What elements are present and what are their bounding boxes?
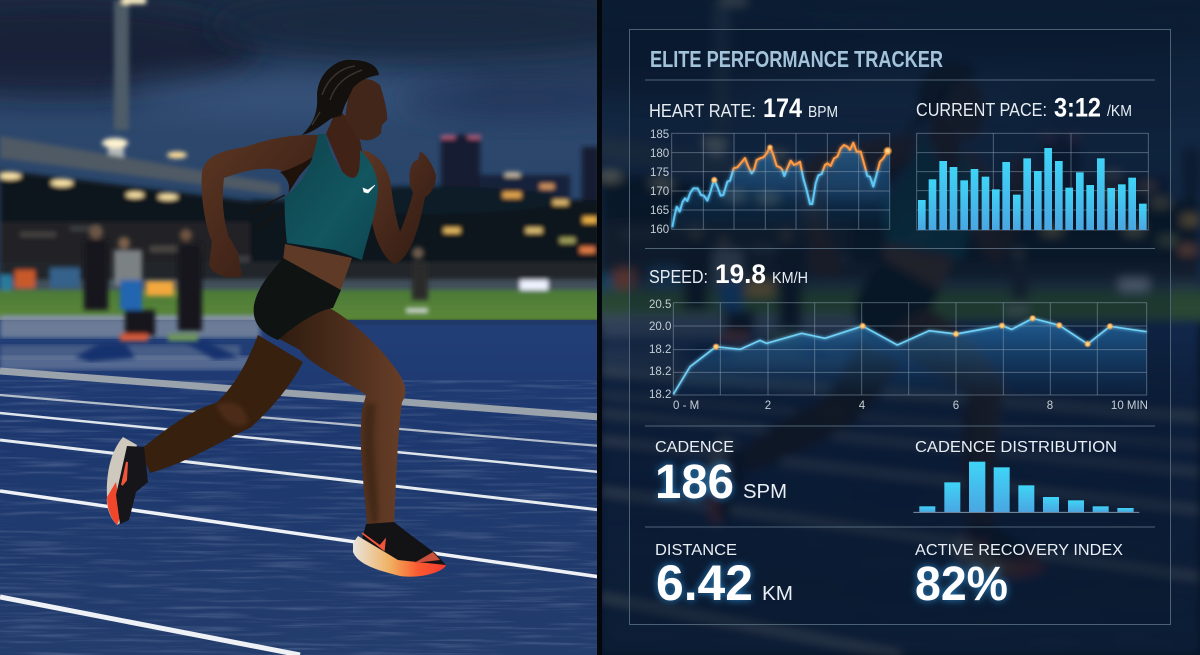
underarm shadow	[280, 150, 322, 198]
rear leg	[140, 335, 303, 473]
distance metric: KM	[762, 583, 793, 605]
running track	[0, 318, 600, 655]
front shoe	[353, 522, 446, 577]
speed axis labels: 18.2	[649, 344, 671, 356]
current pace heading: CURRENT PACE:	[916, 100, 1047, 120]
pace bar chart	[917, 133, 1148, 230]
braided hair	[302, 60, 379, 135]
divider bar	[597, 0, 602, 655]
cadence metric: CADENCE	[655, 439, 734, 456]
distance metric: DISTANCE	[655, 542, 737, 559]
speed axis labels: 20.0	[649, 321, 671, 333]
speed axis labels: 4	[859, 400, 866, 412]
panel: athlete photo scene	[0, 0, 650, 655]
panel: performance tracker	[630, 30, 1170, 624]
speed axis labels: 20.5	[649, 299, 671, 311]
lane lines	[0, 371, 600, 655]
current pace heading: 3:12	[1054, 92, 1101, 122]
rear shoe	[107, 437, 148, 525]
heart rate axis labels: 180	[650, 148, 669, 160]
front arm	[362, 150, 436, 264]
midriff	[283, 244, 352, 292]
running top	[285, 134, 378, 260]
back arm	[202, 135, 322, 277]
loose hair strands	[250, 195, 285, 230]
calf shading	[364, 404, 378, 522]
speed heading	[649, 259, 808, 289]
speed heading: 19.8	[715, 259, 766, 289]
speed axis labels: 8	[1047, 400, 1053, 412]
panel: dimmed photo background	[602, 0, 1200, 655]
runner	[107, 60, 446, 577]
neck and chest	[326, 105, 362, 178]
cadence distribution histogram	[913, 462, 1139, 512]
heart rate axis labels	[650, 129, 669, 236]
heart rate heading	[649, 93, 838, 123]
speed line chart	[649, 299, 1148, 412]
heart rate heading: BPM	[808, 104, 838, 121]
heart rate line chart	[650, 129, 891, 236]
heart rate axis labels: 185	[650, 129, 669, 141]
speed heading: KM/H	[772, 270, 808, 287]
heart rate heading: 174	[763, 93, 802, 123]
speed axis labels: 10 MIN	[1111, 400, 1148, 412]
cadence metric	[655, 439, 787, 509]
cadence metric: SPM	[743, 481, 787, 503]
shorts	[254, 258, 341, 340]
distance metric	[655, 542, 793, 611]
stadium background	[0, 0, 610, 340]
heart rate axis labels: 165	[650, 205, 669, 217]
speed axis labels: 2	[765, 400, 771, 412]
active recovery index metric: 82%	[915, 558, 1008, 611]
heart rate axis labels: 160	[650, 224, 669, 236]
active recovery index metric	[915, 542, 1123, 611]
current pace heading	[916, 92, 1132, 122]
active recovery index metric: ACTIVE RECOVERY INDEX	[915, 542, 1123, 559]
cadence distribution heading: CADENCE DISTRIBUTION	[915, 439, 1117, 456]
speed axis labels	[649, 299, 1148, 412]
speed axis labels: 18.2	[649, 389, 671, 401]
speed axis labels: 6	[953, 400, 959, 412]
front leg	[272, 303, 405, 527]
head	[345, 79, 387, 140]
heart rate heading: HEART RATE:	[649, 101, 756, 121]
sky and clouds	[0, 0, 650, 310]
title: ELITE PERFORMANCE TRACKER	[650, 46, 943, 72]
heart rate axis labels: 170	[650, 186, 669, 198]
current pace heading: /KM	[1107, 103, 1132, 120]
speed heading: SPEED:	[649, 267, 708, 287]
background people	[84, 225, 428, 341]
rear knee highlight	[216, 402, 248, 426]
speed axis labels: 0 - M	[673, 400, 699, 412]
speed axis labels: 18.2	[649, 366, 671, 378]
heart rate axis labels: 175	[650, 167, 669, 179]
distance metric: 6.42	[656, 555, 753, 611]
section rules	[645, 80, 1155, 527]
cadence metric: 186	[655, 456, 734, 509]
